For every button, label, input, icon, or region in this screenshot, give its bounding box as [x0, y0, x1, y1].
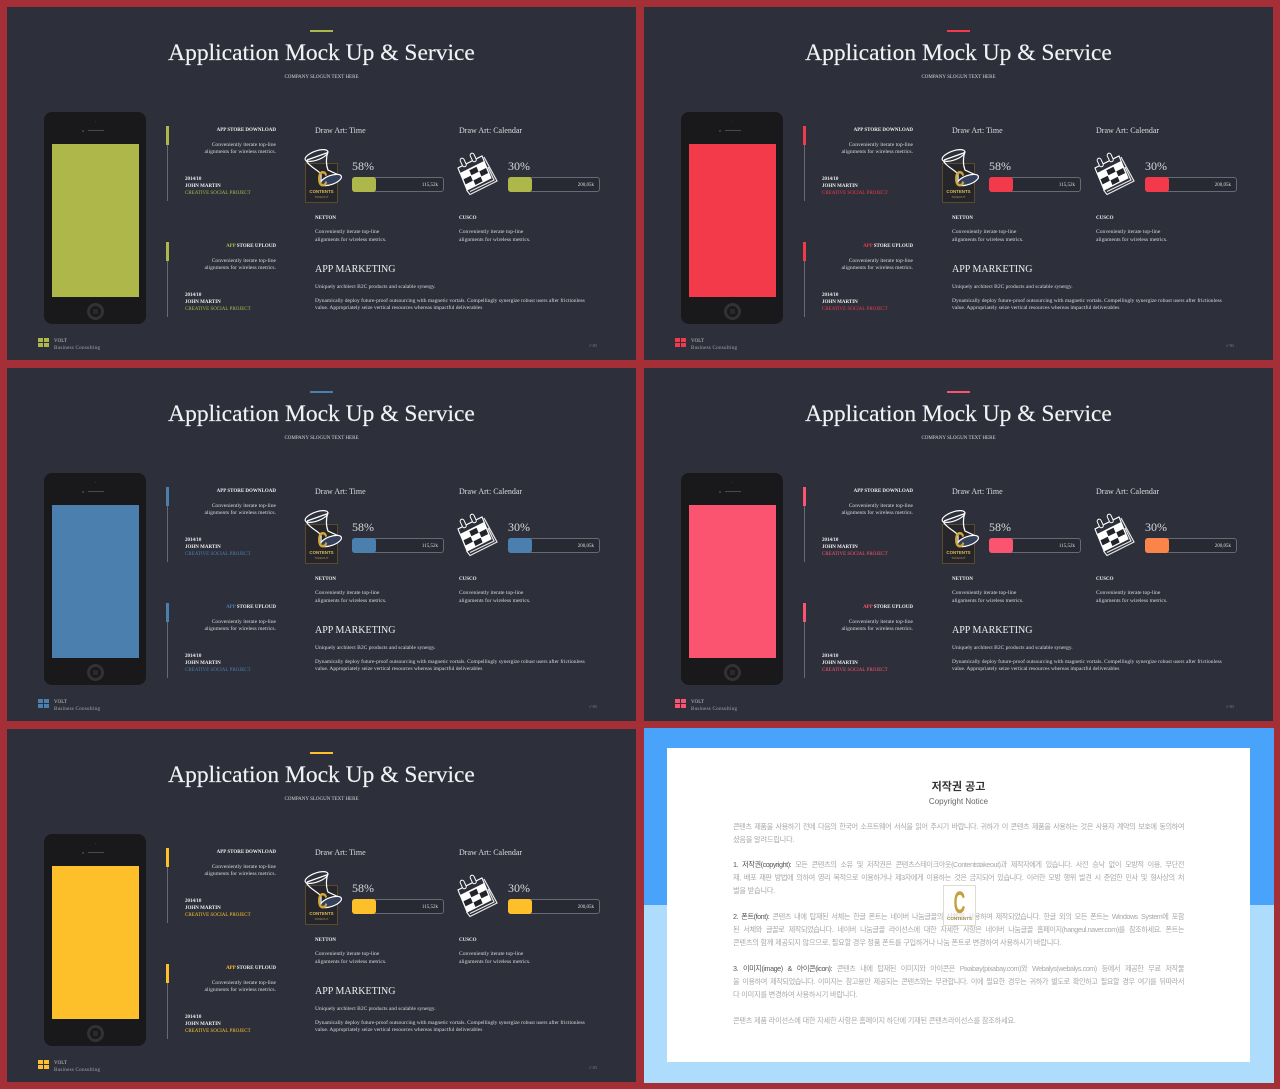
stat: time: 115,52k: [422, 904, 438, 910]
timeline: app store upload: 2014/10: [822, 292, 838, 298]
timeline: app store download: JOHN MARTIN: [185, 544, 221, 550]
subtitle: COMPANY SLOGUN TEXT HERE: [284, 436, 359, 441]
page number: // 01: [1226, 343, 1234, 348]
timeline: app store upload: 2014/10: [185, 1014, 201, 1020]
text block: app marketing: APP MARKETING: [952, 625, 1032, 636]
stat: calendar: 30%: [508, 158, 530, 172]
text block: app marketing: [315, 625, 585, 672]
timeline: app store download: JOHN MARTIN: [185, 184, 221, 188]
stat: time: Conveniently iterate top-line: [315, 229, 379, 235]
stat: calendar: alignments for wireless metrics.: [459, 958, 530, 964]
stat: time: Draw Art: Time: [315, 487, 366, 496]
page number: // 01: [589, 1065, 597, 1070]
phone mockup: [681, 112, 783, 324]
footer logo and company name: Business Consulting: [54, 1068, 100, 1072]
text block: app marketing: [952, 264, 1222, 311]
section 3 image and icon: 을 이용하여 제작되었습니다. 이미지는 참고용만 제공되는 콘텐츠와는 무관합니다. 이에 필요한 경우는 귀하가 별도로 확인하고 필요할 경우 여기를 뒤따라서: [733, 977, 1184, 986]
text block: app marketing: [315, 264, 585, 311]
timeline: app store upload: CREATIVE SOCIAL PROJECT: [185, 1028, 251, 1034]
stat: time: 58%: [989, 158, 1011, 172]
text block: app marketing: APP MARKETING: [315, 625, 395, 636]
phone mockup: [44, 834, 146, 1046]
stat: calendar: 30%: [1145, 158, 1167, 172]
stat: calendar: Conveniently iterate top-line: [459, 951, 523, 957]
footer logo and company name: VOLT: [54, 1060, 67, 1066]
timeline: app store upload: CREATIVE SOCIAL PROJECT: [822, 306, 888, 312]
page number: // 01: [589, 343, 597, 348]
stat: time: CONTENTS: [946, 550, 971, 555]
timeline: app store download: Conveniently iterate top-line: [849, 142, 913, 148]
stat: time: Draw Art: Time: [952, 487, 1003, 496]
timeline: app store upload: APP STORE UPLOUD: [863, 604, 913, 610]
text block: app marketing: Dynamically deploy future-proof outsourcing with magnetic vortals. Compellingly synergize robust users after frictionless: [952, 298, 1222, 304]
stat: calendar: 200,05k: [578, 544, 594, 548]
timeline: app store download: CREATIVE SOCIAL PROJECT: [822, 190, 888, 196]
timeline: app store download: alignments for wireless metrics.: [842, 510, 913, 516]
heading accent rule: [310, 752, 333, 754]
section 1 copyright: 재, 배포 재판 방법에 의하여 영리 목적으로 이용하거나 제3자에게 이용하는 것은 금지되어 있습니다. 이러한 모방 행위 발견 시 준엄한 민사 및 형사상의 처: [733, 873, 1184, 882]
stat: time: CONTENTS: [946, 189, 971, 194]
text block: app marketing: Dynamically deploy future-proof outsourcing with magnetic vortals. Compellingly synergize robust users after frictionless: [315, 298, 585, 304]
heading accent rule: [947, 30, 970, 32]
text block: app marketing: Uniquely architect B2C products and scalable synergy.: [315, 284, 436, 290]
stat: calendar: 30%: [508, 880, 530, 894]
stat: time: [304, 487, 444, 604]
section 2 font: 콘텐츠의 함께 제공되지 않으므로, 필요할 경우 정품 폰트를 구입하거나 나눔 폰트로 변경하여 사용하시기 바랍니다.: [733, 938, 1061, 947]
timeline: app store download: JOHN MARTIN: [822, 544, 858, 550]
stat: calendar: [1094, 126, 1237, 242]
copyright heading: 저작권 공고: [932, 781, 985, 793]
stat: time: alignments for wireless metrics.: [315, 958, 386, 964]
section 2 font: 2. 폰트(font): 콘텐츠 내에 탑재된 서체는 한글 폰트는 네이버 나눔글꼴의 서체를 사용하여 제작되었습니다. 한글 외의 모든 폰트는 Windows System에 포함: [733, 912, 1184, 921]
panel: slide 1 olive: [7, 7, 636, 360]
stat: calendar: 200,05k: [1215, 544, 1231, 548]
text block: app marketing: value. Appropriately seize vertical resources whereas impactful deliverables: [315, 1027, 482, 1033]
stat: time: NETTON: [952, 576, 973, 582]
stat: time: C: [954, 166, 965, 191]
timeline: app store download: APP STORE DOWNLOAD: [854, 488, 913, 494]
timeline: app store download: alignments for wireless metrics.: [205, 510, 276, 516]
stat: time: alignments for wireless metrics.: [952, 598, 1023, 604]
timeline: app store download: CREATIVE SOCIAL PROJECT: [822, 552, 888, 556]
timeline: app store upload: Conveniently iterate top-line: [212, 980, 276, 986]
stat: calendar: 200,05k: [1215, 182, 1231, 188]
timeline: app store upload: [803, 603, 913, 678]
timeline: app store upload: JOHN MARTIN: [822, 300, 858, 304]
timeline: app store download: Conveniently iterate top-line: [212, 502, 276, 508]
timeline: app store download: [166, 126, 276, 201]
stat: time: Draw Art: Time: [952, 126, 1003, 135]
timeline: app store upload: [166, 964, 276, 1039]
stat: time: TAKEOUT: [952, 195, 966, 199]
stat: calendar: alignments for wireless metrics.: [1096, 236, 1167, 242]
timeline: app store download: Conveniently iterate top-line: [212, 864, 276, 870]
stat: time: C: [954, 527, 965, 552]
timeline: app store download: CREATIVE SOCIAL PROJECT: [185, 552, 251, 556]
stat: calendar: CUSCO: [459, 938, 477, 942]
panel: copyright notice: [644, 728, 1274, 1083]
stat: time: Conveniently iterate top-line: [315, 951, 379, 957]
stat: time: alignments for wireless metrics.: [952, 236, 1023, 242]
text block: app marketing: value. Appropriately seize vertical resources whereas impactful deliverables: [952, 666, 1119, 672]
intro paragraph: [733, 822, 1184, 844]
timeline: app store upload: CREATIVE SOCIAL PROJECT: [822, 668, 888, 672]
page number: // 01: [1226, 704, 1234, 709]
subtitle: COMPANY SLOGUN TEXT HERE: [284, 797, 359, 802]
text block: app marketing: Dynamically deploy future-proof outsourcing with magnetic vortals. Compellingly synergize robust users after frictionless: [315, 1020, 585, 1026]
stat: calendar: Draw Art: Calendar: [459, 487, 522, 496]
footer logo and company name: VOLT: [691, 700, 704, 704]
heading accent rule: [310, 391, 333, 392]
text block: app marketing: Dynamically deploy future-proof outsourcing with magnetic vortals. Compellingly synergize robust users after frictionless: [952, 658, 1222, 664]
text block: app marketing: Dynamically deploy future-proof outsourcing with magnetic vortals. Compellingly synergize robust users after frictionless: [315, 658, 585, 664]
timeline: app store download: alignments for wireless metrics.: [205, 871, 276, 877]
intro paragraph: 셨음을 알려드립니다.: [733, 835, 794, 844]
timeline: app store download: 2014/10: [822, 538, 838, 542]
stat: time: Conveniently iterate top-line: [952, 590, 1016, 596]
footer logo and company name: Business Consulting: [691, 706, 737, 712]
stat: calendar: alignments for wireless metrics.: [1096, 598, 1167, 604]
footer logo and company name: VOLT: [691, 338, 704, 344]
timeline: app store download: APP STORE DOWNLOAD: [217, 488, 276, 494]
stat: calendar: 200,05k: [578, 182, 594, 188]
timeline: app store upload: [166, 603, 276, 678]
stat: calendar: Conveniently iterate top-line: [1096, 590, 1160, 596]
timeline: app store upload: alignments for wireless metrics.: [205, 265, 276, 271]
timeline: app store download: [166, 487, 276, 562]
section 3 image and icon: [733, 964, 1184, 999]
timeline: app store download: Conveniently iterate top-line: [212, 142, 276, 148]
section 1 copyright: 1. 저작권(copyright): 모든 콘텐츠의 소유 및 저작권은 콘텐츠스테이크아웃(Contentstakeout)과 제작자에게 있습니다. 사전 승낙 없이 모방적 이용, 무단전: [733, 860, 1184, 869]
stat: time: Draw Art: Time: [315, 848, 366, 857]
text block: app marketing: Uniquely architect B2C products and scalable synergy.: [952, 645, 1073, 651]
timeline: app store upload: Conveniently iterate top-line: [849, 618, 913, 624]
stat: time: 115,52k: [422, 182, 438, 188]
copyright subheading: Copyright Notice: [929, 797, 988, 806]
section 1 copyright: 벌을 받습니다.: [733, 886, 775, 895]
stat: time: 115,52k: [1059, 182, 1075, 188]
footer logo and company name: [38, 338, 100, 350]
stat: time: [304, 848, 444, 964]
timeline: app store upload: JOHN MARTIN: [185, 660, 221, 666]
timeline: app store upload: JOHN MARTIN: [822, 660, 858, 666]
timeline: app store upload: CREATIVE SOCIAL PROJECT: [185, 668, 251, 672]
closing line: 콘텐츠 제품 라이선스에 대한 자세한 사항은 홈페이지 하단에 기재된 콘텐츠라이선스를 참조하세요.: [733, 1016, 1016, 1025]
timeline: app store upload: APP STORE UPLOUD: [226, 604, 276, 610]
timeline: app store upload: APP STORE UPLOUD: [226, 244, 276, 248]
stat: time: NETTON: [315, 216, 336, 220]
stat: time: TAKEOUT: [952, 556, 966, 560]
heading accent rule: [310, 30, 333, 32]
timeline: app store download: [803, 126, 913, 201]
stat: time: 58%: [352, 158, 374, 172]
stat: time: 58%: [352, 880, 374, 894]
section 2 font: [733, 912, 1184, 947]
stat: time: Conveniently iterate top-line: [952, 229, 1016, 235]
stat: time: alignments for wireless metrics.: [315, 236, 386, 242]
text block: app marketing: APP MARKETING: [952, 264, 1032, 275]
footer logo and company name: [38, 699, 100, 712]
stat: time: 115,52k: [1059, 544, 1075, 548]
text block: app marketing: Uniquely architect B2C products and scalable synergy.: [315, 645, 436, 651]
timeline: app store upload: 2014/10: [822, 654, 838, 658]
footer logo and company name: Business Consulting: [54, 346, 100, 350]
stat: time: [304, 126, 444, 242]
stat: calendar: CUSCO: [459, 216, 477, 220]
footer logo and company name: Business Consulting: [691, 346, 737, 350]
stat: time: 58%: [989, 520, 1011, 534]
stat: calendar: alignments for wireless metrics.: [459, 598, 530, 604]
footer logo and company name: [38, 1060, 100, 1072]
timeline: app store download: JOHN MARTIN: [822, 184, 858, 188]
text block: app marketing: value. Appropriately seize vertical resources whereas impactful deliverables: [315, 305, 482, 311]
stat: calendar: CUSCO: [459, 576, 477, 582]
panel: slide 4 pink: [644, 368, 1273, 721]
timeline: app store download: 2014/10: [185, 898, 201, 904]
text block: app marketing: [952, 625, 1222, 672]
stat: time: 115,52k: [422, 544, 438, 548]
stat: calendar: [1094, 487, 1237, 604]
timeline: app store upload: alignments for wireless metrics.: [842, 265, 913, 271]
timeline: app store download: Conveniently iterate top-line: [849, 502, 913, 508]
timeline: app store upload: alignments for wireless metrics.: [842, 626, 913, 632]
timeline: app store download: [166, 848, 276, 923]
timeline: app store upload: alignments for wireless metrics.: [205, 987, 276, 993]
timeline: app store upload: [803, 242, 913, 317]
text block: app marketing: APP MARKETING: [315, 264, 395, 275]
timeline: app store upload: JOHN MARTIN: [185, 1022, 221, 1026]
phone mockup: [681, 473, 783, 685]
footer logo and company name: VOLT: [54, 338, 67, 344]
phone mockup: [44, 473, 146, 685]
timeline: app store upload: APP STORE UPLOUD: [863, 244, 913, 248]
timeline: app store upload: Conveniently iterate top-line: [212, 258, 276, 264]
text block: app marketing: value. Appropriately seize vertical resources whereas impactful deliverables: [952, 305, 1119, 311]
timeline: app store download: 2014/10: [185, 538, 201, 542]
timeline: app store download: 2014/10: [822, 176, 838, 182]
stat: calendar: [457, 126, 600, 242]
stat: time: NETTON: [315, 938, 336, 942]
stat: calendar: alignments for wireless metrics.: [459, 236, 530, 242]
timeline: app store download: APP STORE DOWNLOAD: [217, 128, 276, 132]
stat: calendar: CUSCO: [1096, 216, 1114, 220]
timeline: app store download: alignments for wireless metrics.: [842, 149, 913, 155]
watermark logo: [943, 885, 976, 926]
timeline: app store download: JOHN MARTIN: [185, 906, 221, 910]
footer logo and company name: [675, 699, 737, 712]
stat: calendar: Draw Art: Calendar: [1096, 487, 1159, 496]
stat: time: CONTENTS: [309, 911, 334, 916]
timeline: app store upload: JOHN MARTIN: [185, 300, 221, 304]
timeline: app store upload: 2014/10: [185, 292, 201, 298]
title: Application Mock Up & Service: [168, 762, 475, 788]
stat: calendar: 30%: [508, 520, 530, 534]
stat: time: CONTENTS: [309, 189, 334, 194]
timeline: app store upload: Conveniently iterate top-line: [849, 258, 913, 264]
stat: time: C: [317, 166, 328, 191]
page number: // 01: [589, 704, 597, 709]
stat: time: 58%: [352, 520, 374, 534]
stat: time: Conveniently iterate top-line: [315, 590, 379, 596]
stat: time: [942, 126, 1081, 242]
timeline: app store download: [803, 487, 913, 562]
stat: time: [942, 487, 1081, 604]
section 3 image and icon: 다 이미지를 변경하여 사용하시기 바랍니다.: [733, 990, 857, 999]
stat: calendar: Draw Art: Calendar: [459, 848, 522, 857]
stat: time: CONTENTS: [309, 550, 334, 555]
footer logo and company name: VOLT: [54, 700, 67, 704]
intro paragraph: 콘텐츠 제품을 사용하기 전에 다음의 한국어 소프트웨어 서식을 읽어 주시기 바랍니다. 귀하가 이 콘텐츠 제품을 사용하는 것은 사용자 계약의 보호에 동의하여: [733, 822, 1184, 831]
timeline: app store download: APP STORE DOWNLOAD: [854, 128, 913, 132]
watermark logo: C: [954, 887, 965, 921]
stat: calendar: 30%: [1145, 520, 1167, 534]
timeline: app store upload: CREATIVE SOCIAL PROJECT: [185, 306, 251, 312]
stat: time: NETTON: [952, 216, 973, 220]
text block: app marketing: Uniquely architect B2C products and scalable synergy.: [315, 1006, 436, 1012]
text block: app marketing: [315, 986, 585, 1033]
stat: calendar: 200,05k: [578, 904, 594, 910]
title: Application Mock Up & Service: [168, 401, 475, 427]
subtitle: COMPANY SLOGUN TEXT HERE: [921, 436, 996, 441]
stat: time: Draw Art: Time: [315, 126, 366, 135]
title: Application Mock Up & Service: [805, 401, 1112, 427]
footer logo and company name: [675, 338, 737, 350]
timeline: app store upload: alignments for wireless metrics.: [205, 626, 276, 632]
stat: time: C: [317, 527, 328, 552]
stat: time: TAKEOUT: [315, 556, 329, 560]
timeline: app store upload: APP STORE UPLOUD: [226, 966, 276, 970]
watermark logo: CONTENTS: [947, 916, 972, 921]
stat: time: TAKEOUT: [315, 917, 329, 921]
timeline: app store upload: Conveniently iterate top-line: [212, 618, 276, 624]
heading accent rule: [947, 391, 970, 392]
stat: time: alignments for wireless metrics.: [315, 598, 386, 604]
subtitle: COMPANY SLOGUN TEXT HERE: [284, 75, 359, 80]
text block: app marketing: value. Appropriately seize vertical resources whereas impactful deliverables: [315, 666, 482, 672]
stat: calendar: Conveniently iterate top-line: [1096, 229, 1160, 235]
stat: calendar: Draw Art: Calendar: [459, 126, 522, 135]
text block: app marketing: APP MARKETING: [315, 986, 395, 997]
timeline: app store download: APP STORE DOWNLOAD: [217, 850, 276, 854]
section 1 copyright: [733, 860, 1184, 895]
section 3 image and icon: 3. 이미지(image) & 아이콘(icon): 콘텐츠 내에 탑재된 이미지와 아이콘은 Pixabay(pixabay.com)와 Webalys(webalys.com) 등에서 제공한 무료 저작물: [733, 964, 1184, 973]
timeline: app store download: CREATIVE SOCIAL PROJECT: [185, 190, 251, 196]
stat: calendar: [457, 848, 600, 964]
stat: time: C: [317, 888, 328, 913]
stat: calendar: Conveniently iterate top-line: [459, 229, 523, 235]
stat: calendar: CUSCO: [1096, 576, 1114, 582]
stat: time: TAKEOUT: [315, 195, 329, 199]
subtitle: COMPANY SLOGUN TEXT HERE: [921, 75, 996, 80]
timeline: app store download: alignments for wireless metrics.: [205, 149, 276, 155]
panel: slide 2 red: [644, 7, 1273, 360]
text block: app marketing: Uniquely architect B2C products and scalable synergy.: [952, 284, 1073, 290]
stat: time: NETTON: [315, 576, 336, 582]
title: Application Mock Up & Service: [168, 40, 475, 66]
phone mockup: [44, 112, 146, 324]
stat: calendar: [457, 487, 600, 604]
stat: calendar: Conveniently iterate top-line: [459, 590, 523, 596]
panel: slide 5 yellow: [7, 729, 636, 1082]
section 2 font: 된 서체와 글꼴로 제작되었습니다. 네이버 나눔글꼴 라이선스에 대한 자세한 사항은 네이버 나눔글꼴 홈페이지(hangeul.naver.com)를 참조하세요. 폰트는: [733, 925, 1184, 934]
stat: calendar: Draw Art: Calendar: [1096, 126, 1159, 135]
footer logo and company name: Business Consulting: [54, 706, 100, 712]
title: Application Mock Up & Service: [805, 40, 1112, 66]
timeline: app store upload: 2014/10: [185, 654, 201, 658]
timeline: app store download: CREATIVE SOCIAL PROJECT: [185, 912, 251, 918]
panel: slide 3 blue: [7, 368, 636, 721]
timeline: app store upload: [166, 242, 276, 317]
timeline: app store download: 2014/10: [185, 176, 201, 182]
